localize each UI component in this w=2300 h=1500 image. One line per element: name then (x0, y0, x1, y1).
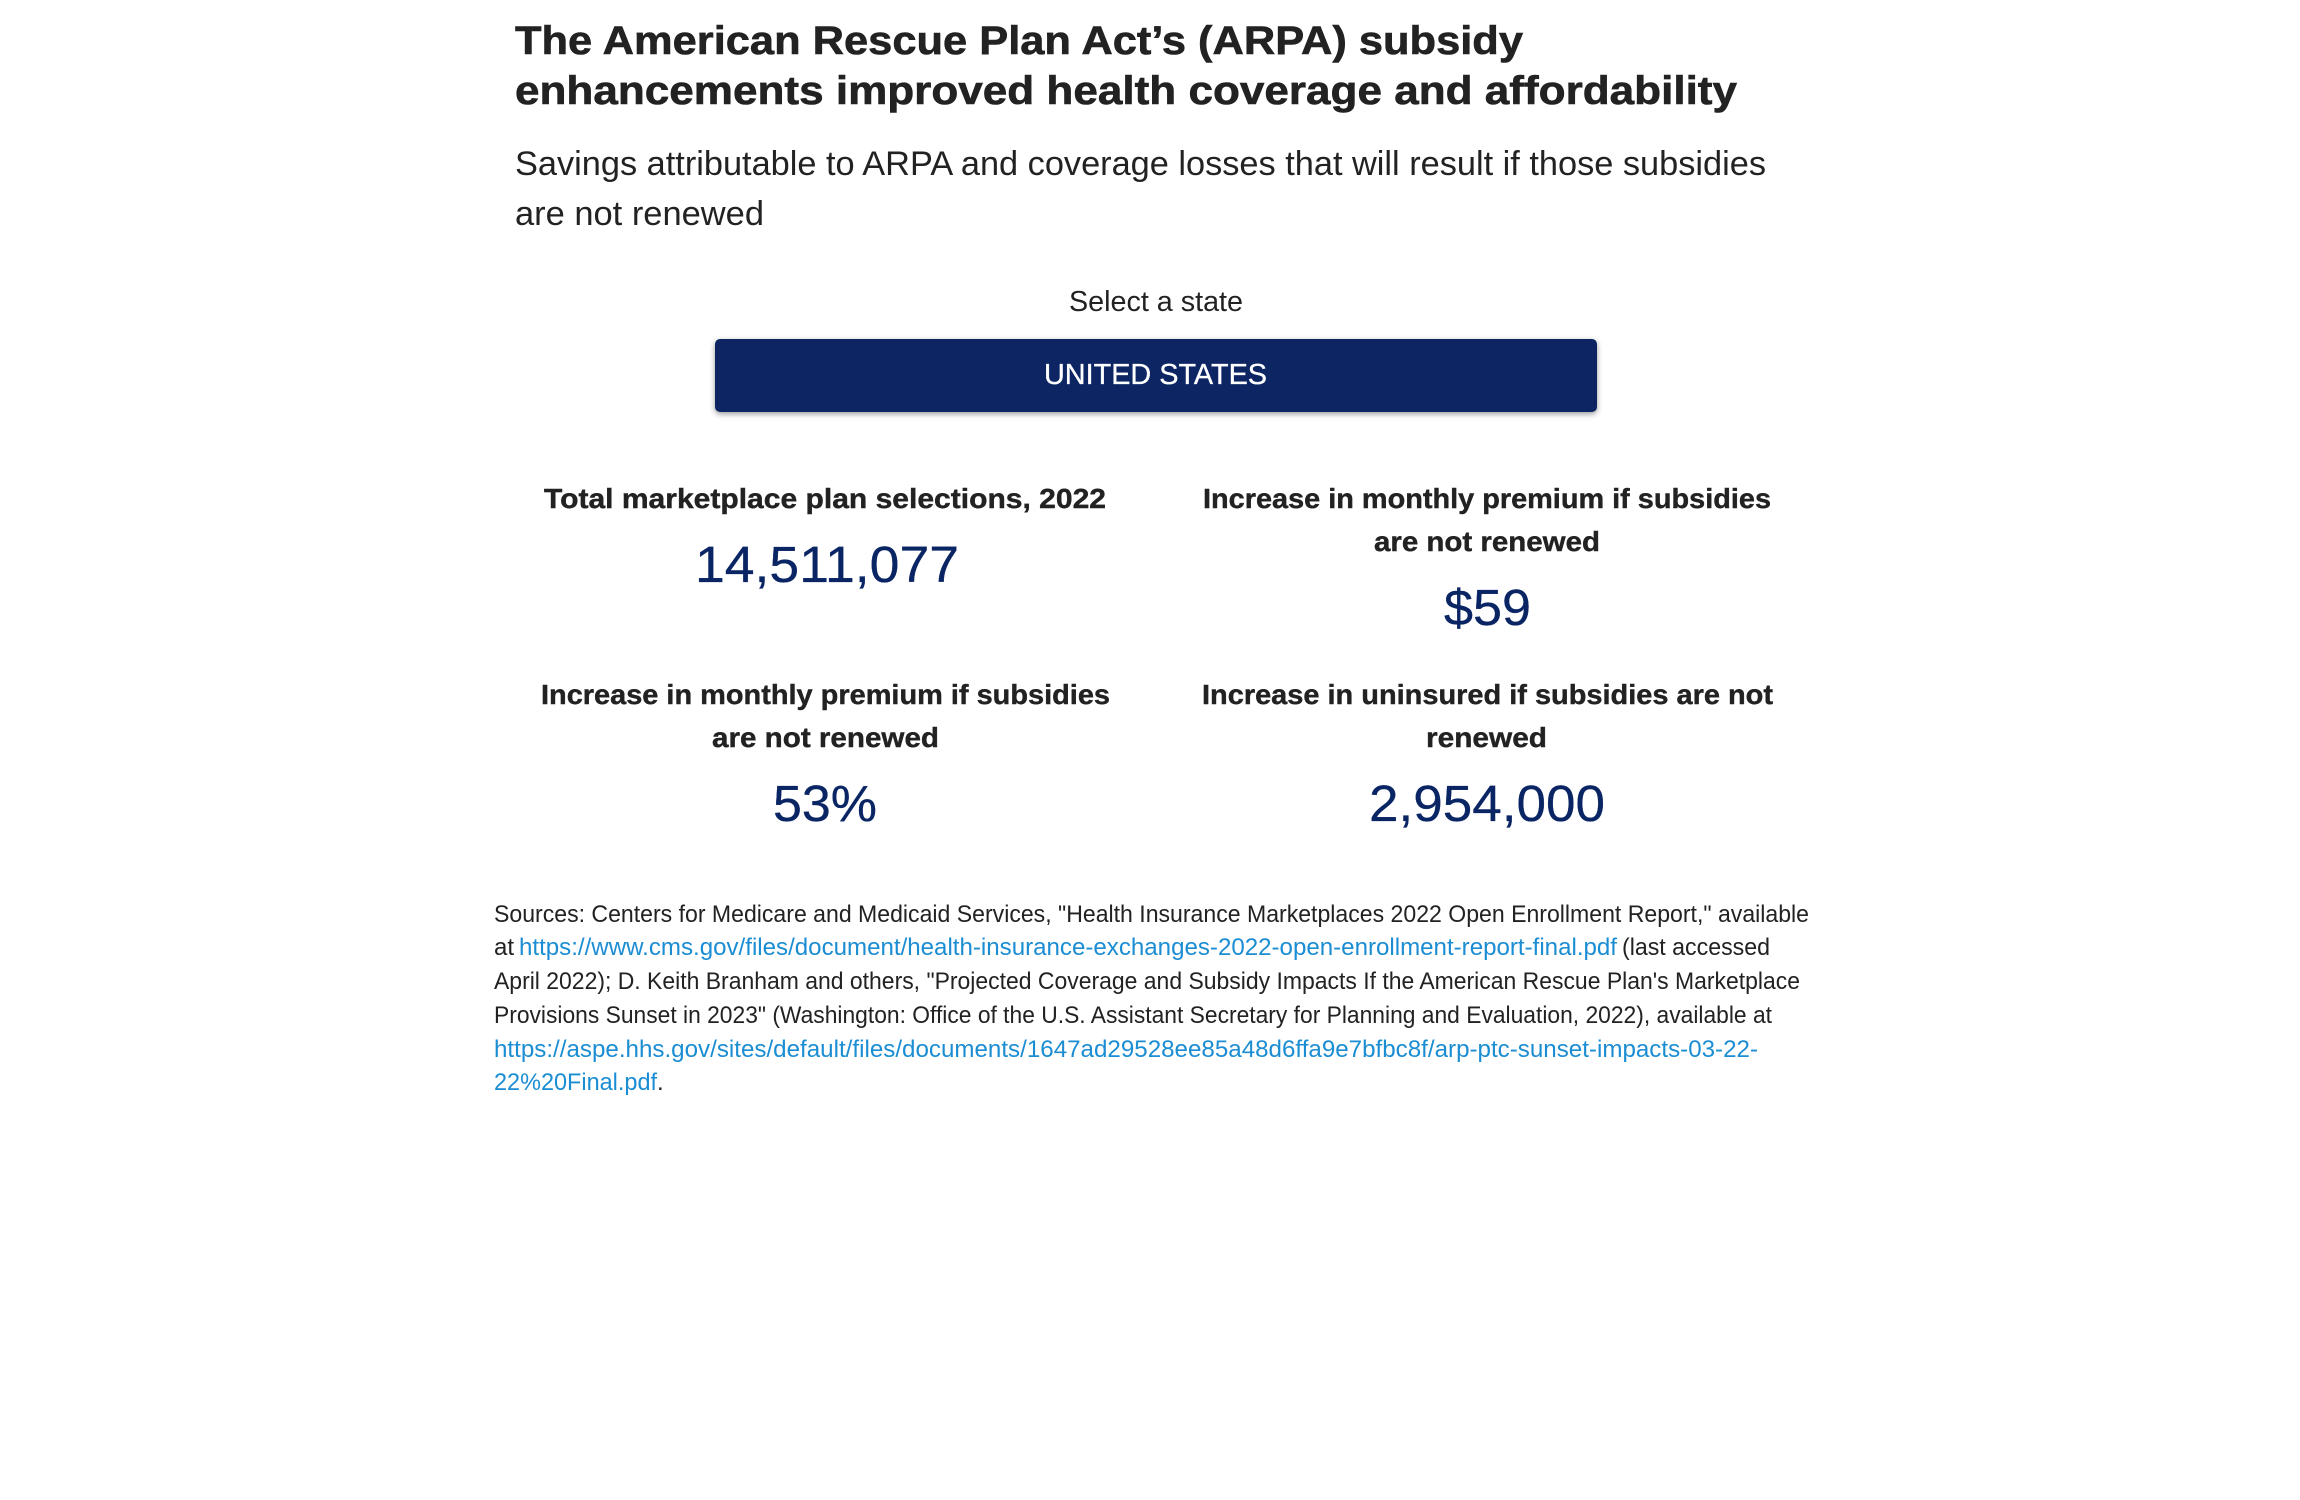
stat: increase in uninsured: renewed (1426, 722, 1547, 753)
sources note: 22%20Final.pdf (494, 1069, 657, 1096)
state selector button: UNITED STATES (1044, 359, 1267, 391)
stat: increase in monthly premium percent: Increase in monthly premium if subsidies (541, 679, 1110, 710)
stat: total marketplace plan selections: 14,511,077 (695, 536, 959, 593)
stat: increase in monthly premium percent: 53% (773, 775, 877, 832)
stat: increase in uninsured: 2,954,000 (1369, 775, 1605, 832)
state selector button (715, 339, 1597, 412)
sources note: . (657, 1069, 664, 1096)
sources note: Sources: Centers for Medicare and Medicaid Services, "Health Insurance Marketplaces 2022 Open Enrollment Report," available (494, 901, 1809, 928)
title: The American Rescue Plan Act’s (ARPA) subsidy (515, 19, 1524, 63)
sources note: https://aspe.hhs.gov/sites/default/files/documents/1647ad29528ee85a48d6ffa9e7bfbc8f/arp-ptc-sunset-impacts-03-22- (494, 1036, 1758, 1063)
subtitle (515, 145, 1766, 233)
selector label: Select a state (1069, 286, 1243, 318)
stat: increase in monthly premium dollars: Increase in monthly premium if subsidies (1203, 483, 1771, 514)
stat: increase in monthly premium dollars: $59 (1444, 579, 1531, 636)
sources note: (last accessed (1622, 934, 1770, 961)
subtitle: are not renewed (515, 195, 764, 233)
sources note: Provisions Sunset in 2023" (Washington: Office of the U.S. Assistant Secretary for Planning and Evaluation, 2022), available at (494, 1002, 1772, 1029)
stat: total marketplace plan selections: Total marketplace plan selections, 2022 (544, 483, 1106, 514)
title (515, 19, 1738, 113)
stat: increase in uninsured (1202, 679, 1773, 832)
stat: increase in monthly premium dollars (1203, 483, 1771, 636)
stat: increase in monthly premium dollars: are not renewed (1374, 526, 1600, 557)
sources note: at (494, 934, 514, 961)
stat: total marketplace plan selections (544, 483, 1106, 593)
sources note (494, 901, 1809, 1096)
subtitle: Savings attributable to ARPA and coverage losses that will result if those subsidies (515, 145, 1766, 183)
stat: increase in uninsured: Increase in uninsured if subsidies are not (1202, 679, 1773, 710)
sources note: https://www.cms.gov/files/document/health-insurance-exchanges-2022-open-enrollment-report-final.pdf (519, 934, 1617, 961)
stat: increase in monthly premium percent (541, 679, 1110, 832)
sources note: April 2022); D. Keith Branham and others, "Projected Coverage and Subsidy Impacts If the American Rescue Plan's Marketplace (494, 968, 1800, 995)
stat: increase in monthly premium percent: are not renewed (712, 722, 939, 753)
title: enhancements improved health coverage and affordability (515, 69, 1738, 113)
